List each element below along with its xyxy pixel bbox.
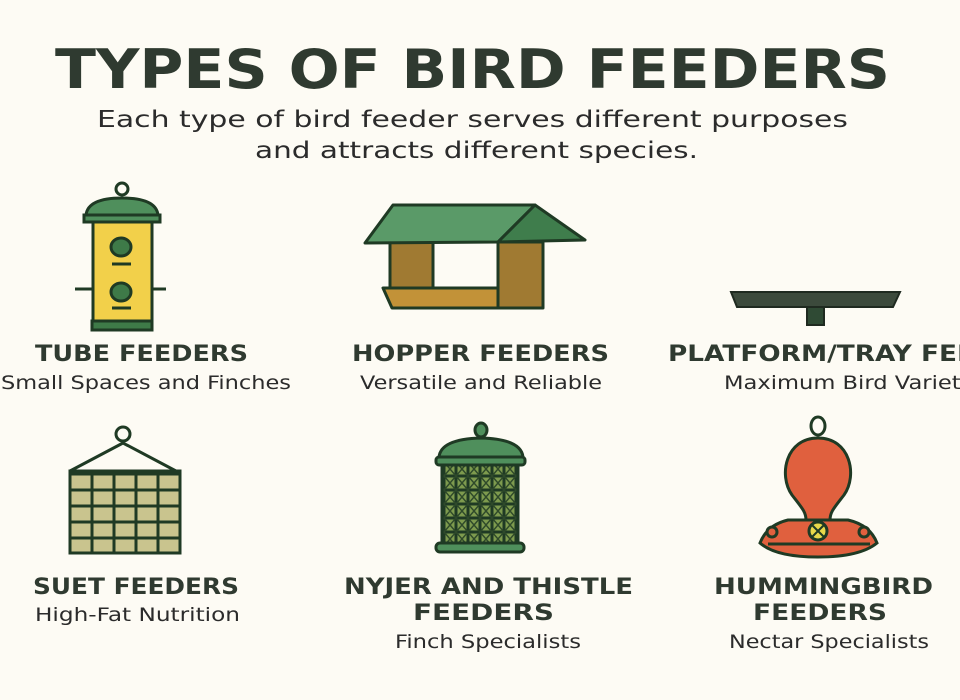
subtitle: and attracts different species.: [255, 138, 698, 164]
label: nyjer feeders: [344, 575, 633, 653]
label: tube feeders: Small Spaces and Finches: [1, 372, 291, 394]
subtitle: [97, 107, 848, 164]
label: hummingbird feeders: Nectar Specialists: [729, 631, 929, 653]
label: suet feeders: SUET FEEDERS: [33, 575, 239, 600]
icon: hummingbird feeder: [760, 417, 877, 557]
label: platform feeders: [668, 342, 960, 394]
icon: tube feeder: [75, 183, 166, 330]
label: hopper feeders: HOPPER FEEDERS: [352, 342, 609, 367]
subtitle: Each type of bird feeder serves different purposes: [97, 107, 848, 133]
label: nyjer feeders: FEEDERS: [413, 601, 554, 626]
label: tube feeders: TUBE FEEDERS: [35, 342, 248, 367]
label: hummingbird feeders: HUMMINGBIRD: [714, 575, 933, 600]
label: hopper feeders: Versatile and Reliable: [360, 372, 602, 394]
icon: hopper feeder: [365, 205, 585, 308]
label: suet feeders: [33, 575, 240, 626]
label: suet feeders: High-Fat Nutrition: [35, 604, 240, 626]
icon: nyjer feeder: [436, 423, 525, 552]
label: hopper feeders: [352, 342, 609, 394]
label: hummingbird feeders: [714, 575, 933, 653]
icon: suet feeder: [70, 427, 180, 553]
label: nyjer feeders: NYJER AND THISTLE: [344, 575, 633, 600]
label: nyjer feeders: Finch Specialists: [395, 631, 581, 653]
title: TYPES OF BIRD FEEDERS: [55, 38, 890, 101]
icon: platform feeder: [731, 292, 900, 325]
label: platform feeders: Maximum Bird Variety: [724, 372, 960, 394]
label: hummingbird feeders: FEEDERS: [753, 601, 887, 626]
label: tube feeders: [1, 342, 291, 394]
